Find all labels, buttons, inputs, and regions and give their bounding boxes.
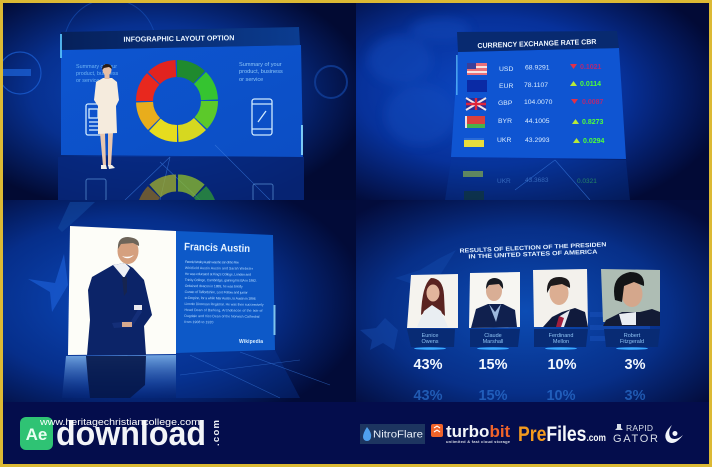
candidate: Claude Marshall: 15%: [478, 357, 508, 373]
heading: IN THE UNITED STATES OF AMERICA: [468, 249, 598, 260]
biography text: Lincoln Diocesan Registrar. He was then successively: [185, 302, 264, 307]
icon reflections: [86, 179, 273, 201]
floor: [58, 157, 304, 200]
candidate: Eunice Owens: 43%: [413, 357, 443, 373]
heading: [459, 242, 607, 260]
star decoration: [28, 254, 68, 312]
biography text: [184, 260, 264, 325]
currency table: UKR: [497, 137, 511, 144]
logo: Rapid Gator: RAPID: [626, 423, 653, 433]
star and stripe decoration: [360, 318, 398, 350]
text: summary right: or service: [239, 77, 263, 83]
heading: RESULTS OF ELECTION OF THE PRESIDEN: [459, 242, 607, 255]
currency table: 78.1107: [524, 82, 548, 89]
table reflection: 0.0321: [577, 178, 597, 185]
photo background white: [68, 226, 176, 355]
floor reflection: [445, 160, 630, 200]
floor reflection: [62, 355, 176, 398]
logo: Rapid Gator: GATOR: [613, 433, 658, 445]
table reflection: UKR: [497, 178, 511, 185]
currency table: EUR: [499, 83, 513, 90]
footer band: [3, 402, 709, 464]
percent reflections: 3%: [625, 388, 646, 404]
floor perspective lines: [515, 160, 590, 200]
icon: phone left: [86, 104, 102, 135]
change values: 0.0294: [583, 138, 605, 145]
candidate: Ferdinand Mellon: [533, 269, 588, 373]
percent reflections: 43%: [413, 388, 443, 404]
currency table: GBP: [498, 100, 513, 107]
wikipedia credit: Wikipedia: [239, 339, 263, 345]
glass panel header: [457, 31, 619, 52]
icon: Ae badge: [20, 417, 53, 450]
change values: 0.8273: [582, 119, 604, 126]
text: summary left: product, business: [76, 71, 119, 77]
candidate: Robert Fitzgerald: Fitzgerald: [620, 339, 644, 345]
table reflection: [463, 171, 597, 200]
background circle decoration left: [0, 52, 41, 94]
candidate: Eunice Owens: [407, 274, 458, 373]
currency table: USD: [499, 66, 513, 73]
info panel: [176, 231, 275, 353]
text: summary left: or service: [76, 78, 99, 84]
glass panel header: [61, 27, 300, 50]
heading: CURRENCY EXCHANGE RATE CBR: [477, 37, 597, 50]
logo: turbobit: turbobit: [446, 422, 511, 441]
biography text: Curate of Taffordshire, Lent Fellow and junior: [185, 290, 249, 295]
icon: Ae badge: Ae: [26, 425, 47, 444]
candidate: Claude Marshall: [469, 272, 520, 373]
dot com vertical: .com: [211, 420, 222, 446]
panel: election results: [356, 200, 709, 404]
logo: NitroFlare: NitroFlare: [373, 428, 423, 440]
biography text: from 1908 to 1920: [184, 320, 214, 324]
text: summary left: Summary of your: [76, 64, 117, 70]
candidate: Eunice Owens: Eunice: [422, 333, 438, 339]
man portrait: [87, 237, 152, 355]
change values: [570, 64, 605, 145]
watermark url: www.heritagechristiancollege.com: [39, 417, 200, 427]
biography text: Dugdale and Vice Dean of the Norwich Cathedral: [184, 314, 260, 319]
candidate: Robert Fitzgerald: [601, 269, 660, 373]
change values: 0.0087: [582, 99, 604, 106]
floor perspective lines: [180, 352, 330, 398]
presenter woman: [94, 64, 119, 169]
donut reflection: [145, 183, 209, 215]
text: summary right: [239, 62, 283, 83]
candidate: Robert Fitzgerald: Robert: [624, 333, 641, 339]
panel: currency exchange rate: [356, 3, 709, 200]
logo: Rapid Gator: [613, 423, 658, 445]
candidate: Ferdinand Mellon: Mellon: [553, 339, 569, 345]
candidate: Ferdinand Mellon: Ferdinand: [549, 333, 573, 339]
text: summary right: Summary of your: [239, 62, 282, 68]
currency table: [497, 64, 553, 144]
download logo: download: [56, 415, 206, 453]
currency table: BYR: [498, 118, 512, 125]
table reflection: 43.3683: [525, 177, 549, 184]
floor perspective lines: [125, 145, 270, 200]
percent reflections: 10%: [546, 388, 576, 404]
text: summary left: [76, 64, 118, 82]
logo: turbobit: unlimited & fast cloud storage: [446, 439, 511, 444]
flags: [464, 63, 487, 147]
currency table: 68.9291: [525, 64, 550, 72]
panel: infographic layout option: [0, 0, 356, 215]
logo: PreFiles: PreFiles.com: [518, 423, 606, 446]
change values: 0.1021: [580, 64, 602, 71]
donut chart: [136, 60, 218, 142]
icon: swirl: [665, 425, 683, 443]
panel: francis austin profile: [3, 200, 356, 402]
candidate: Eunice Owens: Owens: [421, 339, 439, 345]
text: summary right: product, business: [239, 69, 283, 75]
name heading: Francis Austin: [184, 241, 250, 255]
candidate: Claude Marshall: Claude: [484, 333, 502, 339]
biography text: to Dorpinn, for a while Mar Austin, to Austin in 1896: [185, 296, 256, 301]
biography text: Head Dean of Barking, Archdeacon of the Isle of: [184, 308, 263, 313]
candidate: Claude Marshall: Marshall: [483, 339, 503, 345]
glass panel body: [61, 45, 303, 157]
world map texture: [368, 18, 470, 145]
glass panel body: [451, 48, 626, 159]
currency table: 44.1005: [525, 118, 550, 125]
biography text: Whitfield Austin Austin and Sarah Webster: [185, 266, 254, 271]
currency table: 104.0070: [524, 99, 553, 106]
logo: turbobit: [431, 422, 511, 444]
change values: 0.0114: [580, 81, 601, 88]
candidate: Ferdinand Mellon: 10%: [547, 357, 577, 373]
logo: NitroFlare: [360, 424, 425, 444]
biography text: Ordained deacon in 1889, he was briefly: [185, 284, 243, 289]
percent reflections: [413, 388, 646, 404]
icon: mobile phone right: [252, 99, 272, 135]
man reflection: [86, 356, 146, 398]
percent reflections: 15%: [478, 388, 508, 404]
heading: INFOGRAPHIC LAYOUT OPTION: [123, 33, 235, 44]
currency table: 43.2993: [525, 137, 550, 144]
candidate: Robert Fitzgerald: 3%: [625, 357, 646, 373]
biography text: Francis Wesley Austin was the son of the Rev: [185, 260, 239, 265]
biography text: He was educated at King's College, London and: [185, 272, 251, 277]
biography text: Trinity College, Cambridge, gaining his BA in 1892.: [185, 278, 257, 283]
